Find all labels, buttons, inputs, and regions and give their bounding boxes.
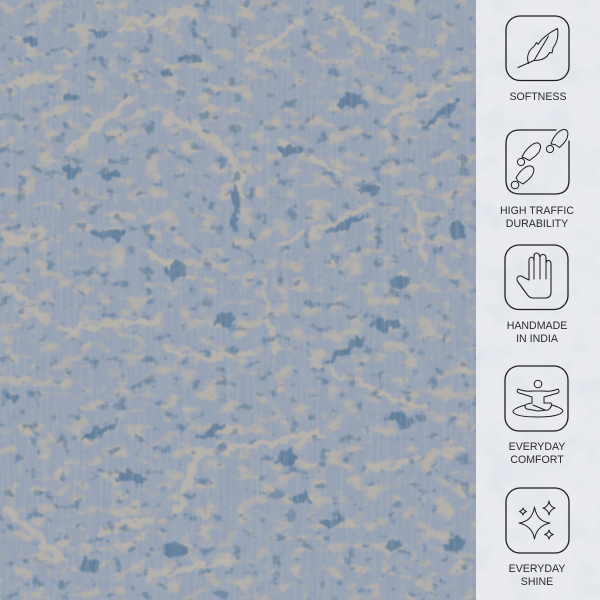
feature: everyday comfort: [505, 366, 568, 466]
icon: sparkles: [506, 488, 569, 553]
label: everyday shine: SHINE: [521, 576, 553, 588]
label: everyday shine: [509, 563, 565, 588]
label: high traffic durability: DURABILITY: [506, 218, 568, 230]
label: everyday comfort: EVERYDAY: [509, 441, 565, 453]
label: handmade in india: IN INDIA: [516, 333, 559, 345]
feature: everyday shine: [506, 488, 569, 588]
feature: handmade in india: [505, 245, 568, 345]
feature: softness: [506, 16, 569, 103]
label: high traffic durability: [500, 205, 574, 230]
side panel: [476, 0, 600, 600]
label: handmade in india: HANDMADE: [507, 320, 567, 332]
label: everyday comfort: [509, 441, 565, 466]
feature: high traffic durability: [500, 129, 574, 230]
icon: footprints: [506, 129, 569, 194]
icon: hand: [505, 245, 568, 310]
icon: meditation: [505, 366, 568, 431]
rug photo background: [0, 0, 476, 600]
label: everyday shine: EVERYDAY: [509, 563, 565, 575]
label: handmade in india: [507, 320, 567, 345]
label: softness: SOFTNESS: [509, 91, 567, 103]
label: high traffic durability: HIGH TRAFFIC: [500, 205, 574, 217]
label: everyday comfort: COMFORT: [510, 454, 564, 466]
icon: feather: [506, 16, 569, 80]
